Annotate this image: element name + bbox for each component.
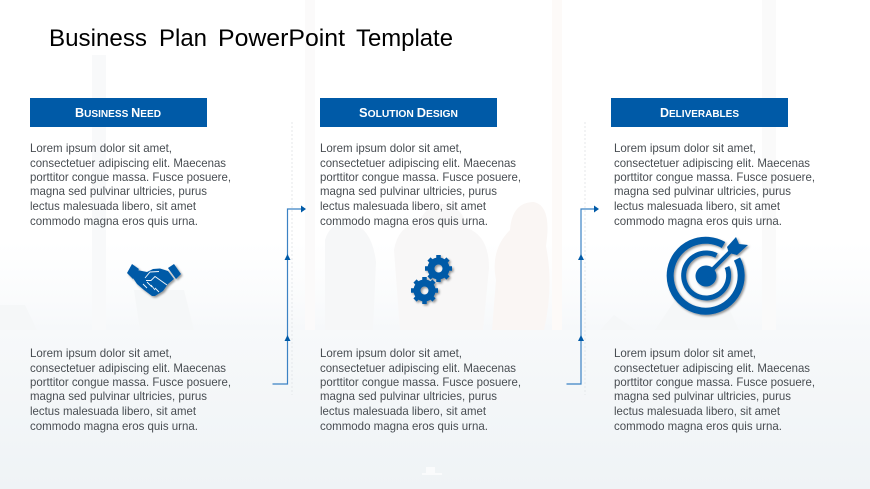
text block: deliverables upper: Lorem ipsum dolor sit amet, <box>614 141 756 155</box>
panel: business need <box>30 98 231 433</box>
text block: business need lower <box>30 346 231 433</box>
title: Plan <box>159 25 207 52</box>
text block: solution design lower: Lorem ipsum dolor sit amet, <box>320 346 462 360</box>
text block: deliverables lower: Lorem ipsum dolor sit amet, <box>614 346 756 360</box>
text block: deliverables upper <box>614 141 815 228</box>
title: Template <box>356 25 453 52</box>
text block: solution design upper <box>320 141 521 228</box>
text block: business need upper: Lorem ipsum dolor sit amet, <box>30 141 172 155</box>
text block: business need lower: commodo magna eros quis urna. <box>30 419 198 433</box>
heading: business need <box>30 98 207 127</box>
text block: solution design lower: consectetuer adipiscing elit. Maecenas <box>320 361 516 375</box>
text block: solution design upper: commodo magna eros quis urna. <box>320 214 488 228</box>
text block: solution design upper: Lorem ipsum dolor sit amet, <box>320 141 462 155</box>
text block: solution design upper: lectus malesuada libero, sit amet <box>320 199 487 213</box>
text block: deliverables upper: porttitor congue massa. Fusce posuere, <box>614 170 815 184</box>
icon: handshake <box>127 264 181 296</box>
heading: deliverables <box>611 98 788 127</box>
text block: solution design upper: porttitor congue massa. Fusce posuere, <box>320 170 521 184</box>
text block: business need lower: lectus malesuada libero, sit amet <box>30 404 197 418</box>
panel: deliverables <box>611 98 815 433</box>
heading: deliverables: DELIVERABLES <box>660 106 739 120</box>
icon: target with arrow <box>670 237 748 311</box>
text block: business need lower: magna sed pulvinar ultricies, purus <box>30 389 207 403</box>
arrow: solution design to deliverables <box>566 206 599 384</box>
text block: business need upper: consectetuer adipiscing elit. Maecenas <box>30 156 226 170</box>
dotted dividers <box>292 122 585 395</box>
text block: deliverables upper: lectus malesuada libero, sit amet <box>614 199 781 213</box>
text block: solution design lower <box>320 346 521 433</box>
text block: deliverables upper: consectetuer adipiscing elit. Maecenas <box>614 156 810 170</box>
text block: business need upper <box>30 141 231 228</box>
icon: gears <box>411 255 452 304</box>
text block: deliverables lower: magna sed pulvinar ultricies, purus <box>614 389 791 403</box>
text block: solution design upper: consectetuer adipiscing elit. Maecenas <box>320 156 516 170</box>
text block: business need lower: consectetuer adipiscing elit. Maecenas <box>30 361 226 375</box>
text block: solution design lower: porttitor congue massa. Fusce posuere, <box>320 375 521 389</box>
text block: solution design upper: magna sed pulvinar ultricies, purus <box>320 184 497 198</box>
text block: deliverables upper: magna sed pulvinar ultricies, purus <box>614 184 791 198</box>
title: Business <box>49 25 147 52</box>
text block: business need lower: porttitor congue massa. Fusce posuere, <box>30 375 231 389</box>
heading: business need: BUSINESS NEED <box>75 106 161 120</box>
panel: solution design <box>320 98 521 433</box>
text block: deliverables lower <box>614 346 815 433</box>
title: PowerPoint <box>218 25 345 52</box>
text block: solution design lower: commodo magna eros quis urna. <box>320 419 488 433</box>
text block: business need upper: lectus malesuada libero, sit amet <box>30 199 197 213</box>
arrow: business need to solution design <box>272 206 306 384</box>
text block: solution design lower: magna sed pulvinar ultricies, purus <box>320 389 497 403</box>
text block: deliverables upper: commodo magna eros quis urna. <box>614 214 782 228</box>
heading: solution design: SOLUTION DESIGN <box>359 106 458 120</box>
text block: business need upper: commodo magna eros quis urna. <box>30 214 198 228</box>
text block: business need lower: Lorem ipsum dolor sit amet, <box>30 346 172 360</box>
text block: business need upper: porttitor congue massa. Fusce posuere, <box>30 170 231 184</box>
text block: deliverables lower: porttitor congue massa. Fusce posuere, <box>614 375 815 389</box>
text block: business need upper: magna sed pulvinar ultricies, purus <box>30 184 207 198</box>
text block: deliverables lower: lectus malesuada libero, sit amet <box>614 404 781 418</box>
text block: deliverables lower: consectetuer adipiscing elit. Maecenas <box>614 361 810 375</box>
heading: solution design <box>320 98 497 127</box>
text block: solution design lower: lectus malesuada libero, sit amet <box>320 404 487 418</box>
text block: deliverables lower: commodo magna eros quis urna. <box>614 419 782 433</box>
